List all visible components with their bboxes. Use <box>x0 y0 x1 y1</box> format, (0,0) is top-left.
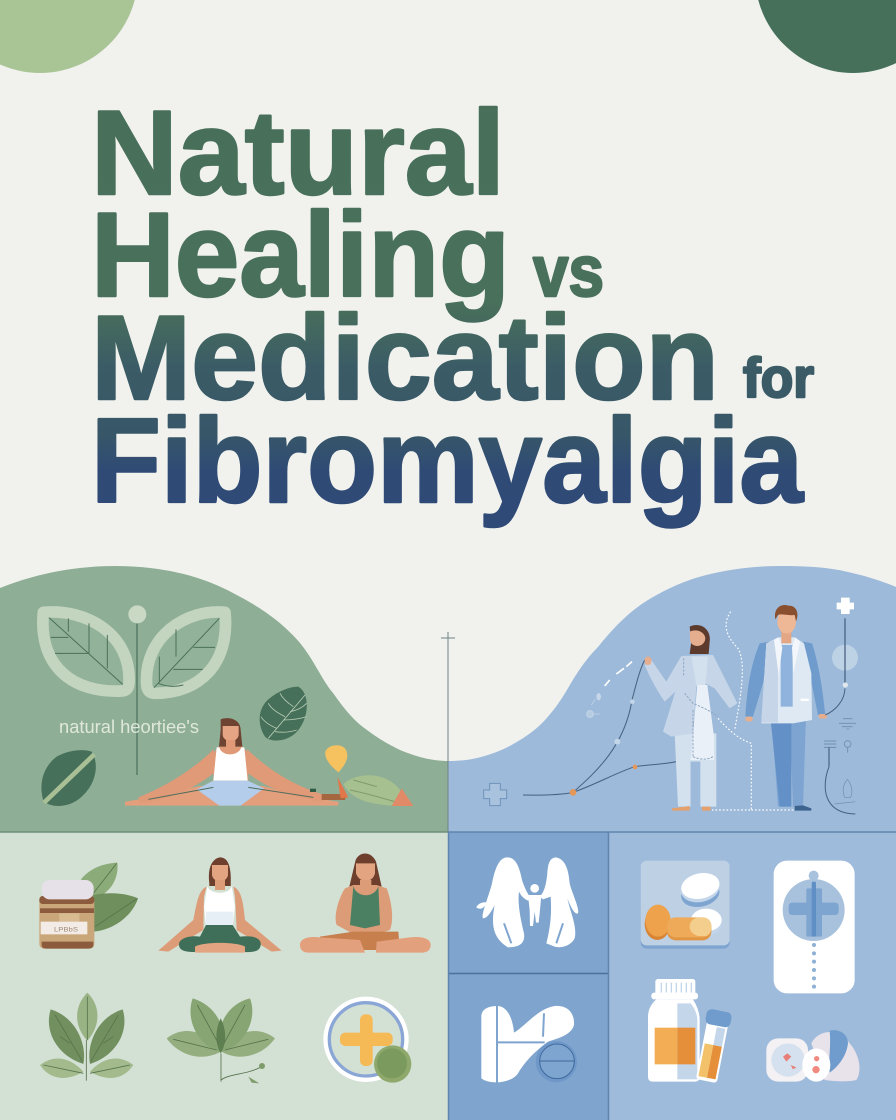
hero illustration: medication side <box>484 598 858 814</box>
title line: Fibromyalgia: Fibromyalgia <box>91 394 804 528</box>
icon: small medical symbols <box>824 719 856 814</box>
icon: outline cross <box>484 783 507 806</box>
figure: meditating woman in white top <box>158 857 282 953</box>
icon: plus badge with green pill <box>326 999 411 1083</box>
figure: male doctor <box>745 605 827 811</box>
icon: dark veined leaf <box>260 687 307 741</box>
icon: spreading herb sprig <box>167 998 275 1083</box>
icon: lab dish and capsules <box>766 1030 860 1082</box>
chart: treatment curves <box>523 660 694 796</box>
title line: Medication: Medication <box>91 291 719 425</box>
icon: jar with leaves: LPBbS <box>54 926 79 933</box>
top-left decorative circle <box>0 0 138 73</box>
icon: large right leaf outline <box>146 612 226 693</box>
title <box>91 86 814 528</box>
title line: Natural: Natural <box>91 86 505 220</box>
hero illustration: natural side <box>41 605 413 806</box>
icon: five-leaf herb <box>40 993 133 1081</box>
marker: curve nodes <box>570 699 637 796</box>
panel: medication hero background <box>448 566 896 832</box>
panel: natural remedies grid <box>0 832 448 1120</box>
panel: medication icon grid <box>609 832 896 1120</box>
title line: Healing: Healing <box>91 188 510 322</box>
icon: floating dashes and bubbles <box>587 662 632 717</box>
panel: natural hero background <box>0 566 449 832</box>
icon: striped dark leaf <box>41 750 96 806</box>
icon: medicine bottle <box>648 979 700 1082</box>
icon: jar with leaves <box>39 863 138 949</box>
icon: herb bundle and flame <box>322 745 413 806</box>
icon: white card with medical cross <box>774 861 855 993</box>
dotted line <box>812 943 816 989</box>
panel: medication icon column <box>448 832 609 1120</box>
caption: natural remedies label: natural heortiee's <box>59 716 199 737</box>
icon: IV drip with cross <box>825 598 858 715</box>
figure: female patient <box>645 625 737 811</box>
icon: large left leaf outline <box>43 612 129 691</box>
panel rules <box>0 832 896 1120</box>
figure: seated woman in green top <box>300 854 431 953</box>
figure: woman stretching <box>125 718 338 806</box>
title word: for: for <box>743 346 814 409</box>
icon: family silhouette <box>476 857 578 947</box>
natural remedies icons <box>39 854 431 1083</box>
title word: vs: vs <box>533 232 604 312</box>
medication icons <box>476 857 860 1084</box>
icon: abstract organ with tablet <box>481 1006 577 1084</box>
icon: sample tube <box>694 1008 732 1083</box>
centre divider with tick <box>441 632 455 832</box>
top-right decorative circle <box>755 0 896 73</box>
icon: pills on tray <box>641 861 730 949</box>
icon: plant stem with bud <box>128 605 146 775</box>
connector: dotted path between figures <box>712 612 795 810</box>
